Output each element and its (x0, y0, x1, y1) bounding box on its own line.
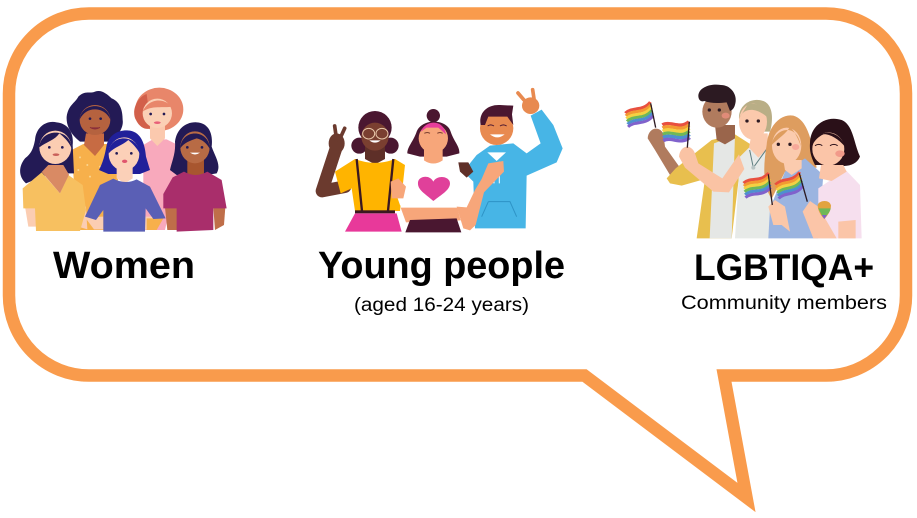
young woman in heart t-shirt (391, 109, 504, 232)
label: aged 16-24 years: (aged 16-24 years) (354, 295, 529, 316)
illustration: LGBTIQA+ community members with rainbow flags (625, 85, 862, 238)
young woman with glasses, yellow top (322, 111, 405, 232)
woman with red hair, pink top (134, 88, 183, 230)
young man in blue hoodie (463, 90, 563, 228)
woman with short blonde hair and necklace (679, 100, 772, 238)
man in yellow jacket with flags (648, 85, 752, 238)
woman with blue hair, blue-violet top (85, 130, 166, 232)
label: LGBTIQA+: LGBTIQA+ (694, 247, 874, 288)
illustration: group of young people (322, 90, 563, 232)
woman with curly hair, orange dotted top (67, 91, 123, 230)
flag held by man (625, 102, 656, 128)
woman with long dark hair, yellow top (20, 122, 87, 231)
flags in front of women (743, 172, 807, 205)
label: Young people: Young people (318, 245, 565, 287)
woman with dark hair, magenta top (163, 122, 227, 232)
woman with dark hair in pink t-shirt (803, 119, 862, 238)
woman with long golden hair in blue shirt (764, 115, 823, 238)
flag held by woman with blonde hair (662, 122, 690, 148)
illustration: group of women (20, 88, 227, 232)
label: Women: Women (53, 245, 195, 287)
label: Community members: Community members (681, 293, 887, 314)
